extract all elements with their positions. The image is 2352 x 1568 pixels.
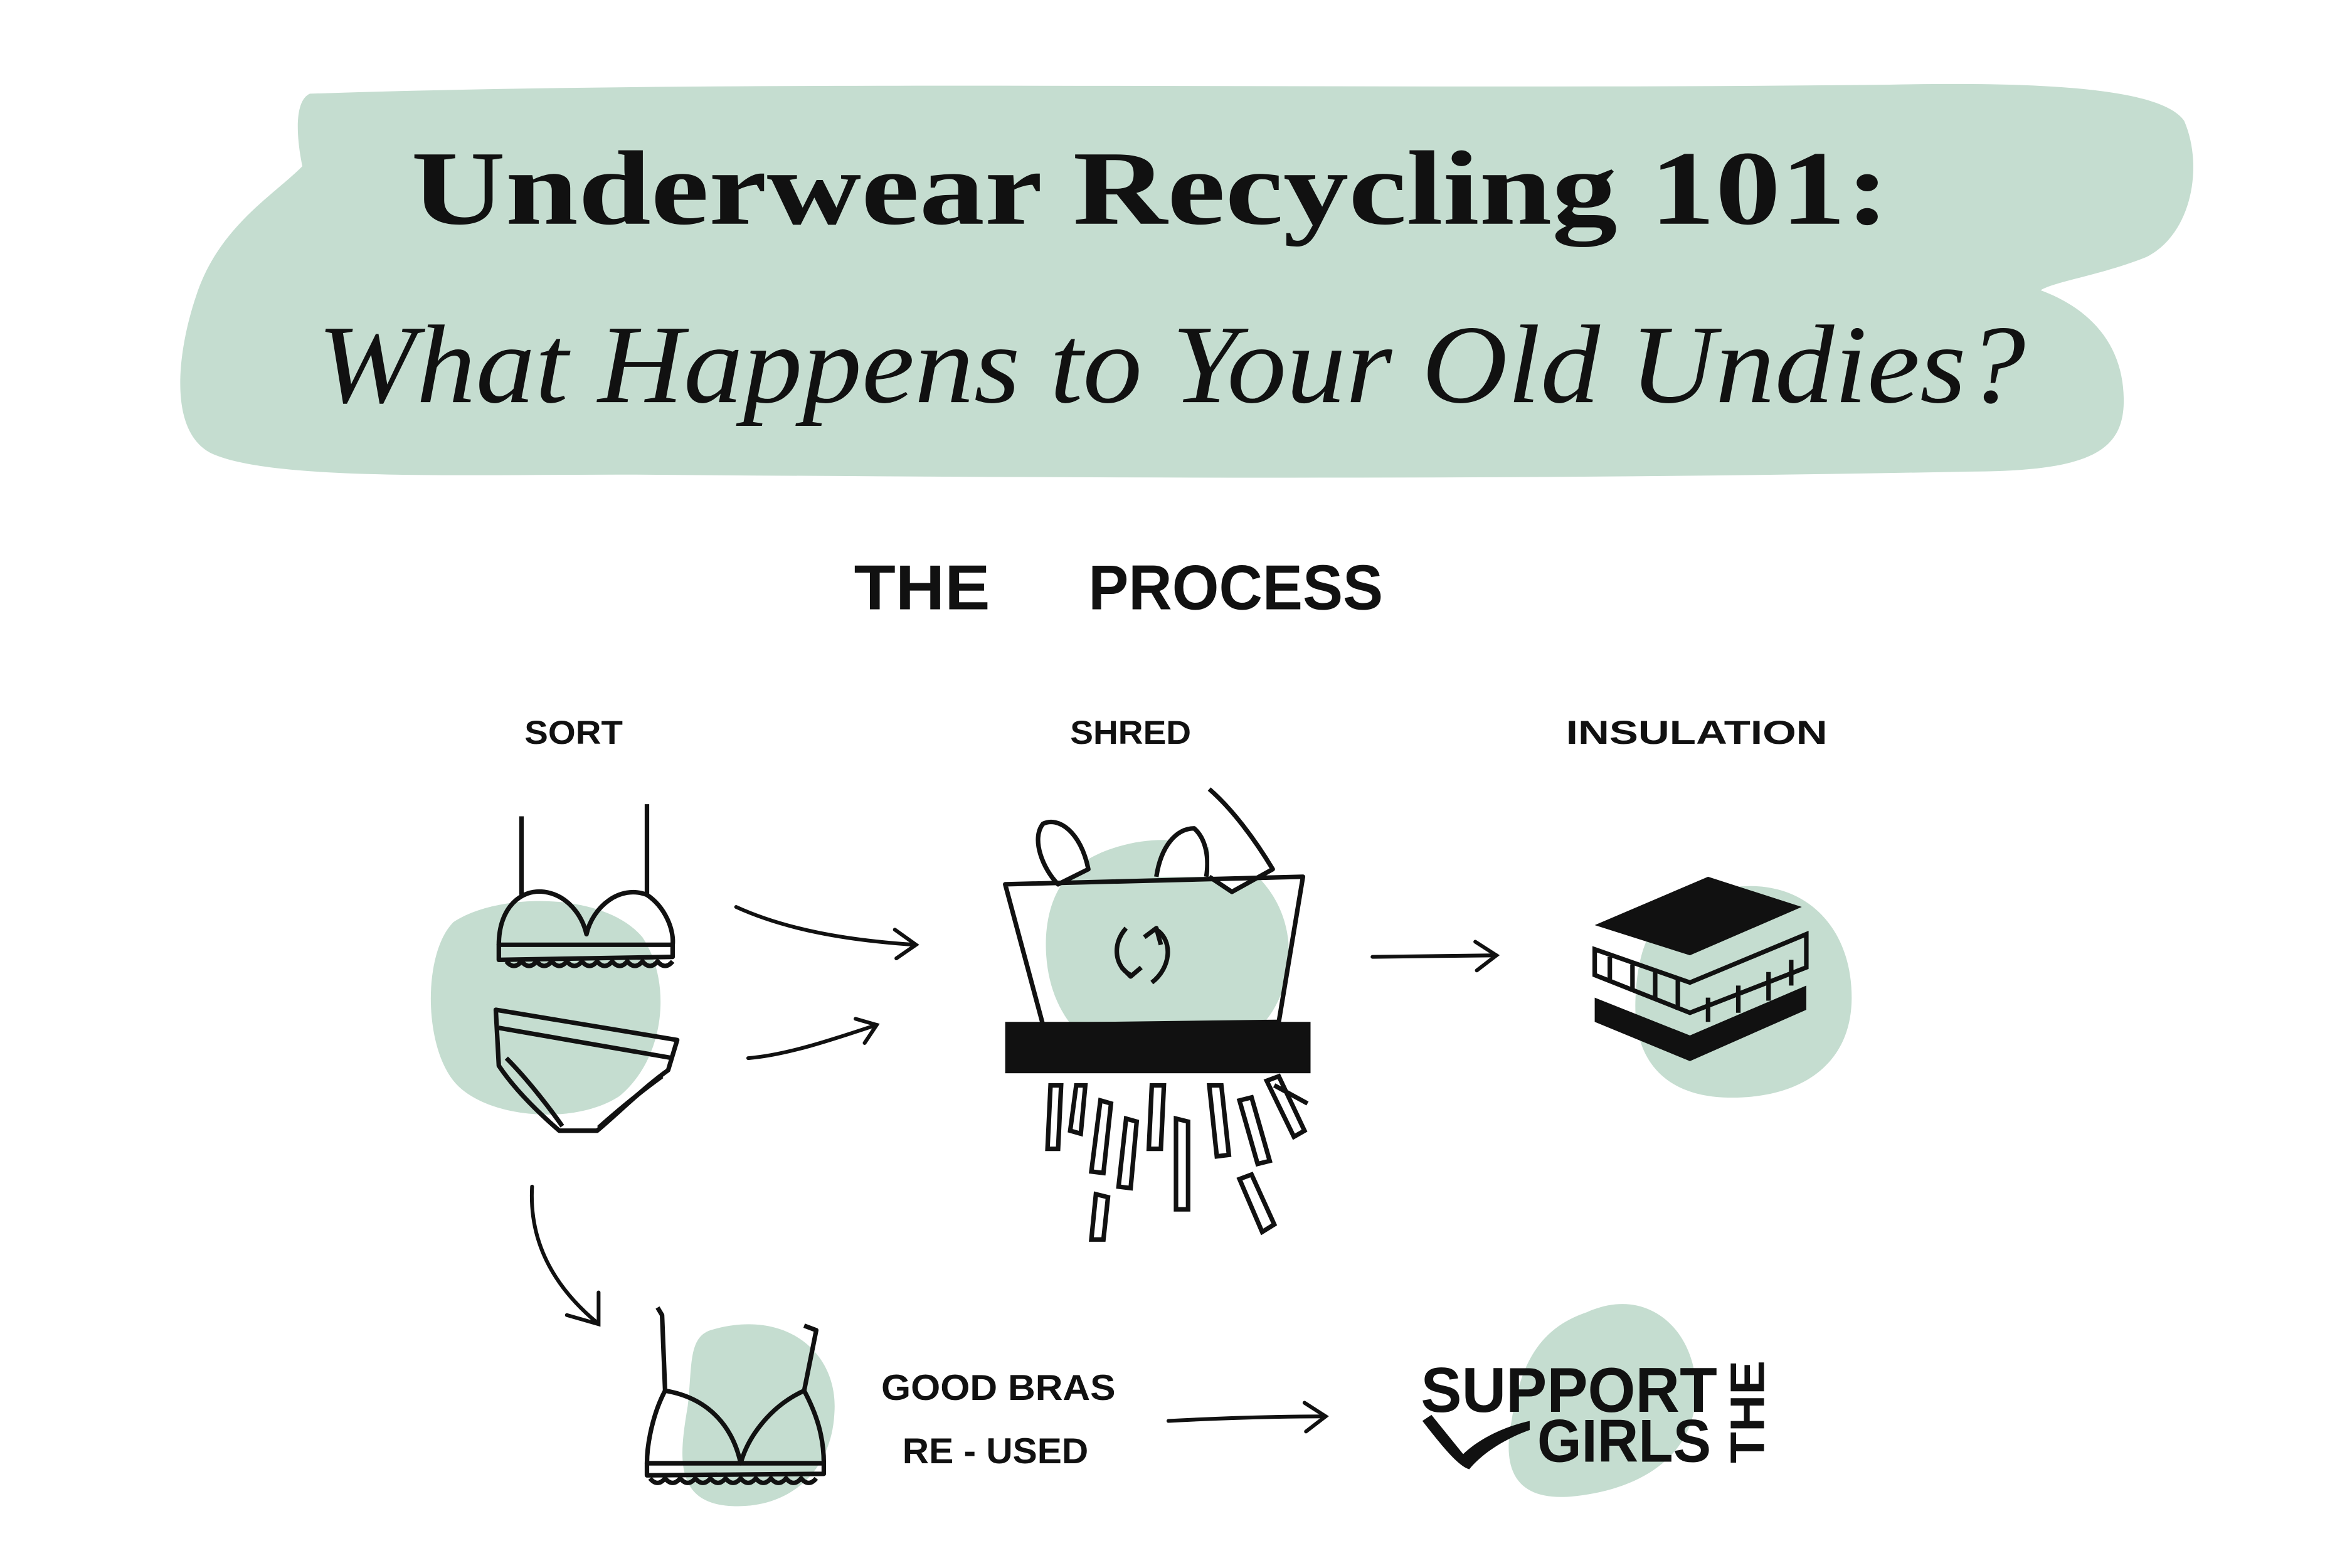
label: insulation: INSULATION	[1566, 714, 1828, 751]
arrow: sort to shred (upper)	[736, 907, 916, 958]
label: shred: SHRED	[1070, 714, 1191, 751]
label: sort: SORT	[524, 714, 623, 751]
icon: good bra	[647, 1308, 835, 1506]
icon: sort bra and panties	[431, 804, 677, 1131]
title banner	[180, 84, 2193, 478]
logo: support the girls: GIRLS	[1537, 1408, 1711, 1475]
logo: support the girls: SUPPORT	[1421, 1355, 1717, 1426]
icon: shredder	[1005, 789, 1310, 1239]
title line 1: Underwear Recycling 101:	[411, 130, 1890, 247]
title line 2: What Happens to Your Old Undies?	[317, 302, 2025, 426]
logo: support the girls: THE	[1721, 1360, 1774, 1463]
text: good bras re-used	[881, 1368, 1116, 1471]
heading: the process: PROCESS	[1088, 552, 1383, 623]
text: good bras re-used: RE - USED	[903, 1431, 1088, 1471]
arrow: sort to shred (lower)	[748, 1019, 877, 1058]
arrow: shred to insulation	[1372, 941, 1496, 970]
heading: the process: THE	[854, 552, 990, 623]
icon: insulation layers	[1595, 877, 1851, 1098]
arrow: good bras to support the girls	[1168, 1403, 1326, 1431]
logo: support the girls	[1421, 1304, 1774, 1497]
heading: the process	[854, 552, 1383, 623]
text: good bras re-used: GOOD BRAS	[881, 1368, 1116, 1408]
arrow: sort down to good bras	[532, 1187, 598, 1324]
